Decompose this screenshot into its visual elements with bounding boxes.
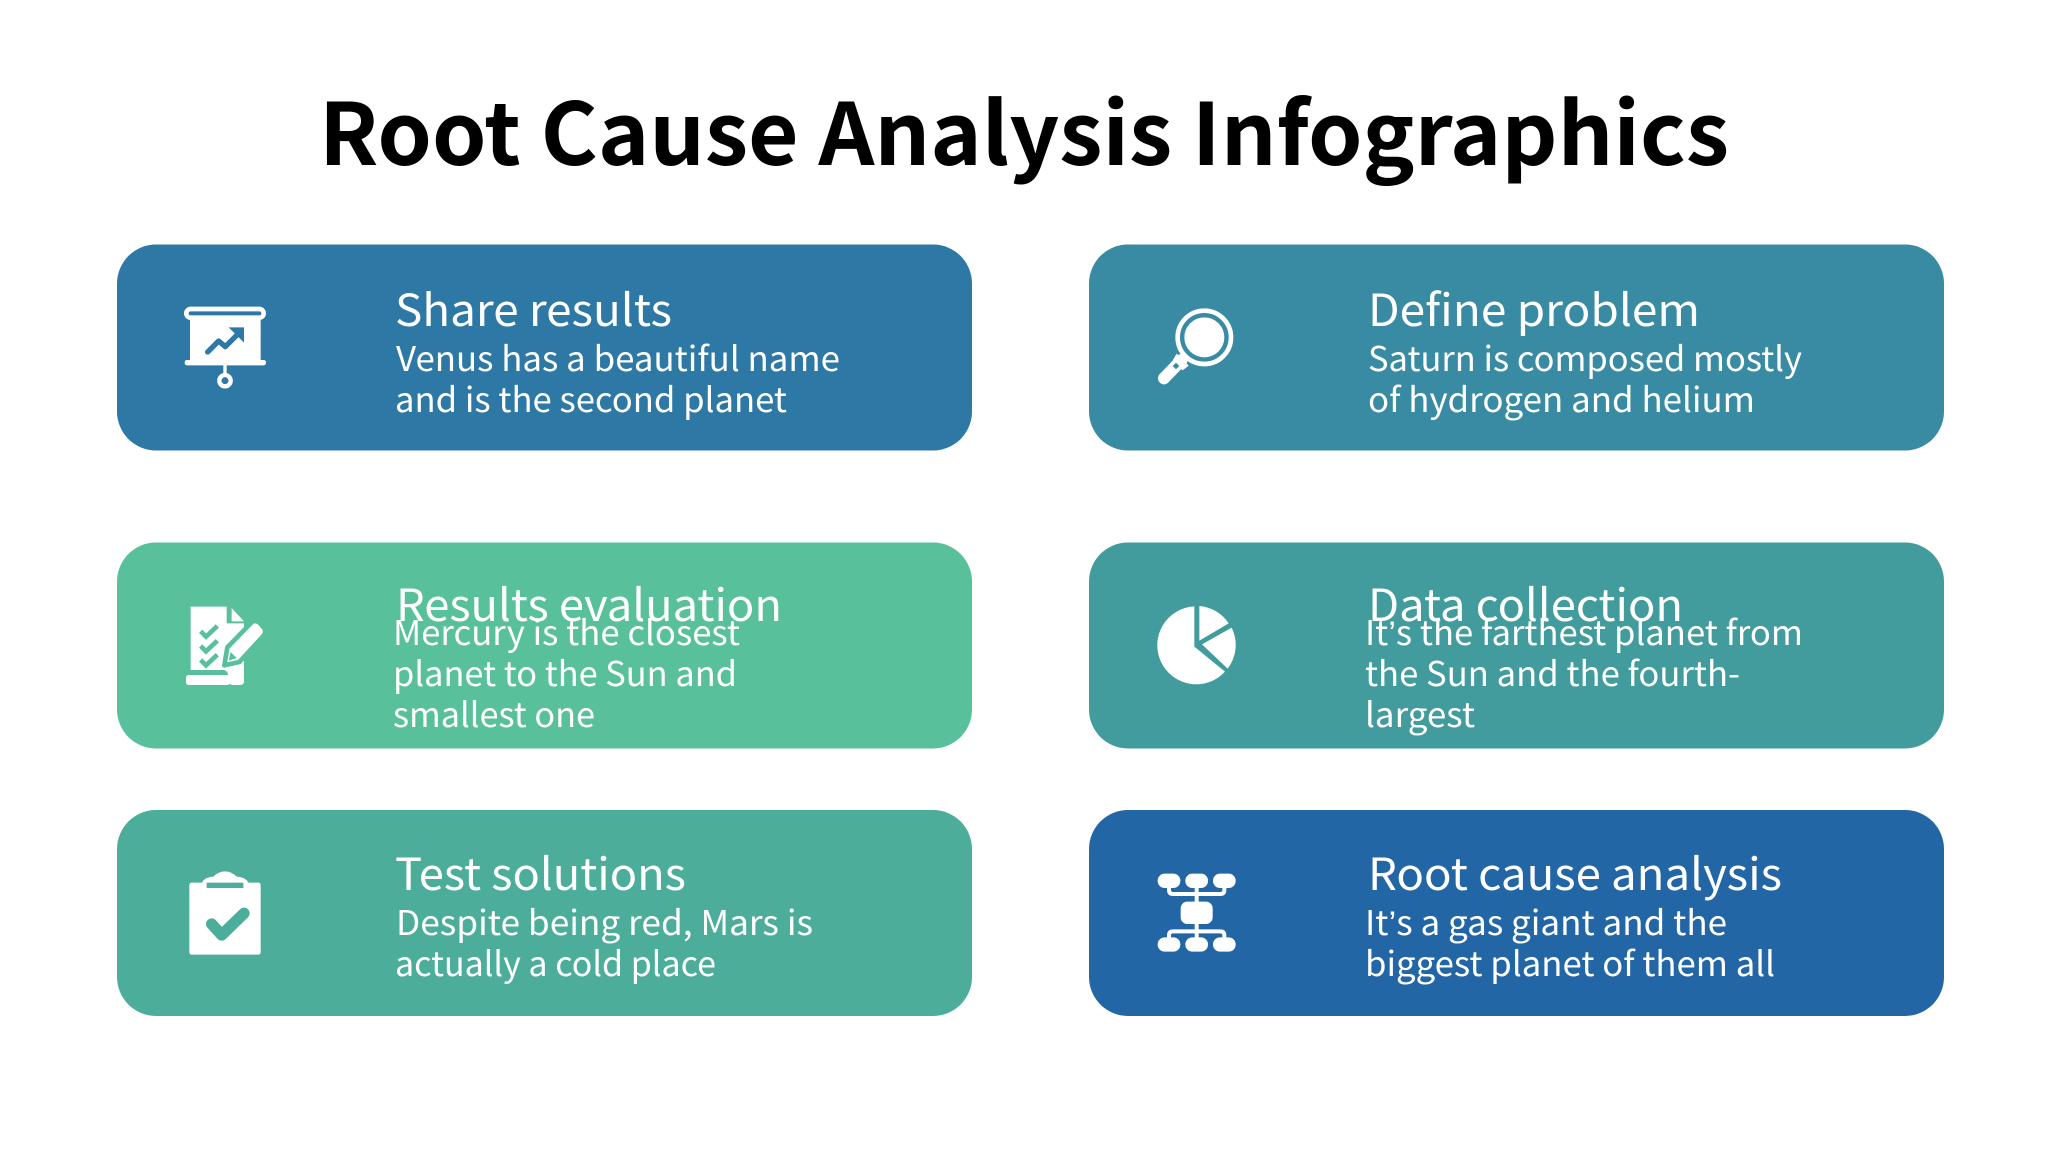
text: share results description: Venus has a beautiful name [396, 332, 840, 381]
text: data collection description: It’s the farthest planet from [1365, 606, 1803, 655]
card background [117, 810, 972, 1016]
panel: define problem [1089, 244, 1944, 450]
text: results evaluation description [393, 606, 740, 737]
heading: define problem: Define problem [1368, 275, 1700, 339]
heading: share results: Share results [395, 275, 672, 339]
text: root cause analysis description: biggest planet of them all [1365, 937, 1775, 986]
text: test solutions description: actually a cold place [395, 937, 716, 986]
panel: share results [117, 244, 972, 450]
text: results evaluation description: planet to the Sun and [393, 647, 737, 696]
text: share results description: and is the second planet [395, 373, 787, 422]
text: root cause analysis description: It’s a gas giant and the [1365, 896, 1727, 945]
text: define problem description [1368, 332, 1802, 422]
panel: root cause analysis [1089, 810, 1944, 1016]
card background [117, 244, 972, 450]
heading: root cause analysis: Root cause analysis [1368, 839, 1782, 903]
text: results evaluation description: smallest one [393, 688, 595, 737]
heading: test solutions: Test solutions [395, 839, 686, 903]
card background [117, 542, 972, 748]
icon: magnifying glass [1164, 311, 1231, 378]
panel: results evaluation [117, 542, 972, 748]
text: define problem description: of hydrogen and helium [1368, 373, 1755, 422]
icon: clipboard with check [189, 871, 261, 955]
heading: data collection: Data collection [1368, 570, 1683, 634]
text: data collection description: largest [1365, 688, 1475, 737]
text: results evaluation description: Mercury is the closest [393, 606, 740, 655]
panel: data collection [1089, 542, 1944, 748]
text: test solutions description [395, 896, 813, 986]
text: share results description [395, 332, 840, 422]
text: data collection description [1365, 606, 1803, 737]
heading: results evaluation: Results evaluation [396, 570, 782, 634]
card background [1089, 542, 1944, 748]
icon: pie chart [1157, 606, 1236, 684]
card background [1089, 244, 1944, 450]
card background [1089, 810, 1944, 1016]
panel: test solutions [117, 810, 972, 1016]
icon: presentation board [185, 309, 266, 386]
text: define problem description: Saturn is composed mostly [1368, 332, 1802, 381]
icon: root cause tree [1158, 874, 1236, 952]
icon: checklist with pencil [186, 607, 265, 685]
title: Root Cause Analysis Infographics [319, 65, 1729, 190]
text: root cause analysis description [1365, 896, 1775, 986]
text: test solutions description: Despite being red, Mars is [396, 896, 813, 945]
text: data collection description: the Sun and the fourth- [1365, 647, 1740, 696]
